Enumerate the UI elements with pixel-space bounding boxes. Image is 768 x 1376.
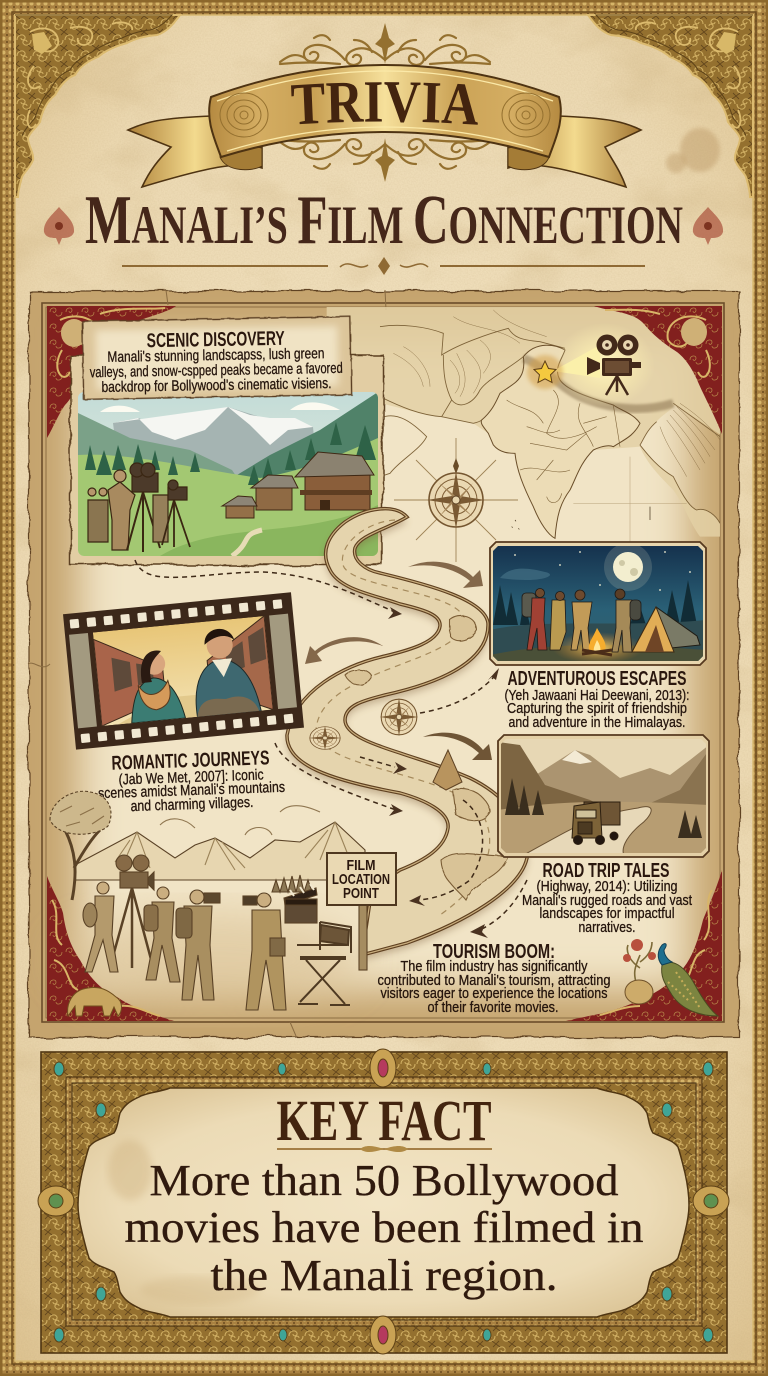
text: tourism boom: of their favorite movies. <box>428 999 558 1016</box>
woman <box>131 650 186 724</box>
tent landmark <box>433 750 462 790</box>
trivia banner <box>126 23 643 188</box>
sign: film location point: POINT <box>343 885 379 902</box>
text: adventurous escapes <box>504 668 690 731</box>
text: road trip tales: Manali's rugged roads and vast <box>522 892 693 909</box>
text: romantic journeys: and charming villages. <box>130 794 254 815</box>
gems <box>38 1049 729 1354</box>
title flourish left <box>44 207 74 245</box>
corner: bottom left <box>47 876 174 1021</box>
title flourish right <box>693 207 723 245</box>
person four <box>243 893 286 1010</box>
card: scenic discovery: valleys, and snow-cspped peaks became a favored <box>90 360 343 381</box>
key fact ornate frame <box>41 1052 727 1353</box>
map islands on road <box>345 616 508 900</box>
banner title: TRIVIA <box>291 82 478 125</box>
card: scenic discovery: SCENIC DISCOVERY <box>147 328 285 352</box>
text: romantic journeys <box>97 747 286 816</box>
text: road trip tales: landscapes for impactful <box>540 905 674 922</box>
image: scenic discovery <box>70 355 383 565</box>
road compass rose <box>380 698 418 736</box>
key fact body: the Manali region. <box>210 1251 558 1300</box>
map star and projector <box>525 331 644 405</box>
road <box>287 509 527 960</box>
dashed arrowheads <box>388 607 499 938</box>
director chair <box>297 922 351 1005</box>
map parchment <box>28 290 739 1037</box>
text: adventurous escapes: Capturing the spirit of friendship <box>507 700 687 717</box>
card: scenic discovery: backdrop for Bollywood's cinematic visiens. <box>101 375 332 396</box>
key fact divider <box>277 1146 492 1152</box>
hikers <box>522 588 641 652</box>
title divider <box>122 257 645 275</box>
image: adventurous escapes <box>490 542 706 665</box>
ribbon main <box>209 65 561 157</box>
compass <box>394 438 518 562</box>
text: tourism boom: visitors eager to experience the locations <box>380 985 608 1002</box>
banner title <box>291 82 478 125</box>
text: road trip tales: narratives. <box>578 919 636 936</box>
person two <box>144 887 180 982</box>
sketch shrubs <box>272 875 312 892</box>
tripod film camera <box>110 855 154 968</box>
text: romantic journeys: (Jab We Met, 2007]: Iconic <box>118 766 264 789</box>
man <box>189 626 261 717</box>
campfire <box>582 628 612 655</box>
panel: key fact <box>38 1049 729 1354</box>
text: romantic journeys: scenes amidst Manali's mountains <box>98 779 285 802</box>
text: adventurous escapes: and adventure in the Himalayas. <box>508 714 686 731</box>
text: tourism boom <box>378 941 610 1016</box>
text: adventurous escapes: ADVENTUROUS ESCAPES <box>508 668 686 690</box>
main title: MANALI’S FILM CONNECTION <box>85 182 683 259</box>
text: tourism boom: The film industry has significantly <box>400 958 588 975</box>
big wooden house <box>295 452 374 510</box>
card: scenic discovery: Manali's stunning landscapss, lush green <box>107 345 325 366</box>
text: romantic journeys: ROMANTIC JOURNEYS <box>111 747 270 775</box>
curved arrow: road trip <box>423 733 492 760</box>
text: adventurous escapes: (Yeh Jawaani Hai Deewani, 2013): <box>504 687 690 704</box>
sketch: film crew scene <box>50 791 396 1010</box>
medium house <box>251 475 298 510</box>
banner ornament top <box>280 23 490 65</box>
text: tourism boom: contributed to Manali's tourism, attracting <box>378 972 610 989</box>
key fact heading: KEY FACT <box>276 1088 492 1153</box>
key fact body: movies have been filmed in <box>124 1203 644 1252</box>
panel: map <box>28 290 739 1037</box>
projector beam <box>558 331 644 405</box>
sketch hills <box>75 822 365 880</box>
person three <box>176 890 220 1000</box>
sign: film location point <box>327 853 396 970</box>
text: road trip tales: ROAD TRIP TALES <box>542 860 670 882</box>
dashed path: scenic to road <box>135 560 527 932</box>
sign: film location point: FILM <box>346 857 376 874</box>
key fact body: More than 50 Bollywood <box>150 1156 618 1205</box>
corner: bottom right <box>566 870 722 1021</box>
sketch clouds <box>160 806 320 835</box>
film camera icon <box>587 334 641 395</box>
potted flower <box>623 939 656 1004</box>
road compass medallion <box>309 726 341 750</box>
card: scenic discovery <box>82 317 352 399</box>
small house <box>222 496 257 518</box>
clapperboard <box>284 884 317 923</box>
ribbon filigree <box>220 93 550 137</box>
ribbon tail left <box>128 116 262 187</box>
image: romantic journeys film strip <box>63 592 304 750</box>
film crew <box>88 463 190 552</box>
banner ornament bottom <box>280 138 490 182</box>
image: road trip tales <box>498 735 709 857</box>
peacock <box>658 944 718 1016</box>
tent <box>632 607 700 652</box>
corner: top right <box>594 306 722 434</box>
person one <box>83 882 118 972</box>
truck <box>572 802 620 844</box>
text: tourism boom: TOURISM BOOM: <box>433 941 555 963</box>
corner: top left <box>47 306 176 438</box>
film sprocket holes <box>70 599 293 743</box>
location star <box>534 361 556 382</box>
sign: film location point: LOCATION <box>332 871 390 888</box>
key fact body <box>124 1156 644 1300</box>
text: road trip tales <box>522 860 693 936</box>
key fact parchment <box>78 1088 689 1317</box>
ribbon tail right <box>508 116 641 187</box>
map of south asia <box>327 307 723 547</box>
elephant <box>68 987 122 1016</box>
sketch tree <box>50 791 111 900</box>
curved arrow: romantic <box>305 637 383 664</box>
curved arrow: adventurous <box>408 562 483 588</box>
border corner top right <box>588 15 753 197</box>
border corner top left <box>15 15 180 197</box>
text: road trip tales: (Highway, 2014): Utilizing <box>536 878 678 895</box>
